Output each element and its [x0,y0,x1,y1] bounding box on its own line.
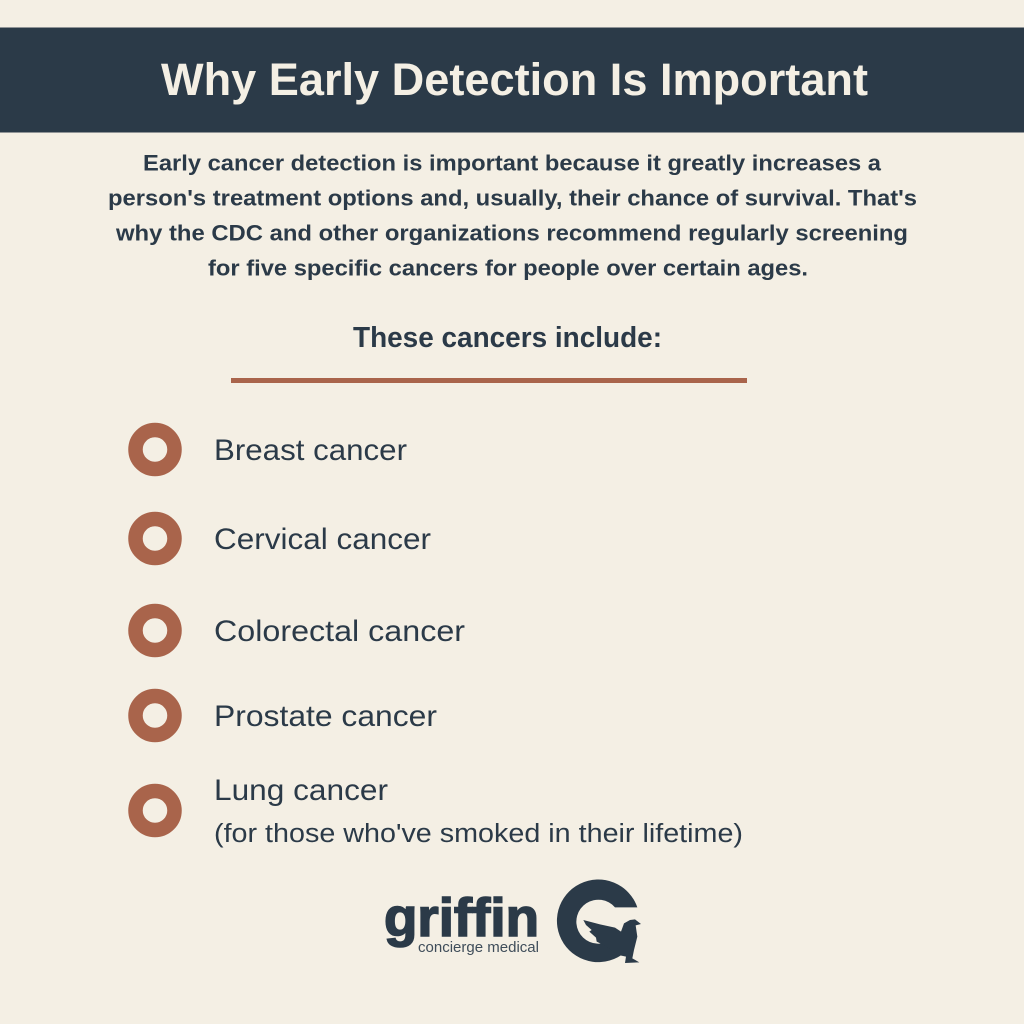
intro text: person's treatment options and, usually, their chance of survival. That's [108,186,917,210]
item: lung cancer: Lung cancer [214,774,388,807]
subheading: These cancers include: [353,322,662,354]
item: lung cancer [136,774,743,848]
logo emblem [557,879,641,963]
title: Why Early Detection Is Important [161,54,868,105]
item: colorectal cancer [136,611,465,650]
intro text: for five specific cancers for people over certain ages. [208,256,808,280]
logo tagline: concierge medical [418,940,539,956]
title banner [0,28,1024,132]
item: lung cancer: (for those who've smoked in their lifetime) [214,820,743,848]
item: breast cancer: Breast cancer [214,434,407,467]
divider rule [231,378,747,383]
logo wordmark: griffin [384,888,539,948]
griffin logo [384,879,641,963]
item: breast cancer [136,430,407,469]
cancer list [136,430,743,848]
item: prostate cancer [136,696,437,735]
intro text [108,150,917,280]
item: colorectal cancer: Colorectal cancer [214,615,465,648]
intro text: why the CDC and other organizations recommend regularly screening [115,220,908,246]
item: prostate cancer: Prostate cancer [214,700,437,733]
intro text: Early cancer detection is important because it greatly increases a [143,150,882,176]
item: cervical cancer: Cervical cancer [214,523,431,556]
item: cervical cancer [136,519,431,558]
